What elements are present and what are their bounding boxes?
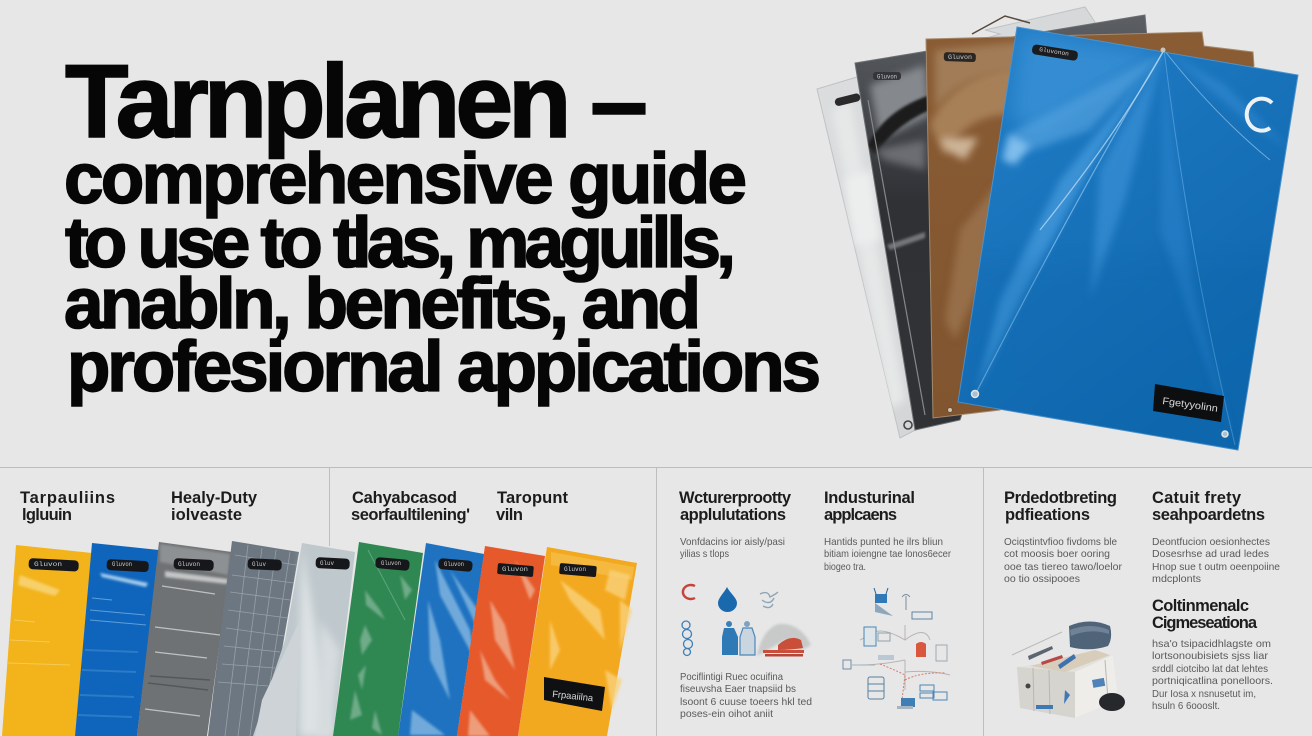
- icon: swirl: [760, 592, 778, 608]
- tarp: blue front: [958, 27, 1300, 470]
- heading: Coltinmenalc: Coltinmenalc: [1152, 597, 1249, 615]
- heading: Catuit frety: Catuit frety: [1152, 489, 1242, 507]
- heading: Healy-Duty: Healy-Duty: [171, 489, 258, 507]
- text block: ooe tas tiereo tawo/loelor: [1004, 561, 1122, 573]
- heading: Prdedotbreting: [1004, 489, 1117, 524]
- swatch: orange: Gluvon: [502, 566, 528, 573]
- heading: Wcturerprootty: Wcturerprootty: [679, 489, 792, 507]
- text block: lsoont 6 cuuse toeers hkl ted: [680, 696, 812, 708]
- heading: Cahyabcasod: Cahyabcasod: [352, 489, 457, 507]
- product label: [1153, 384, 1224, 422]
- grommets: [972, 390, 1228, 437]
- swatch: yellow: [2, 545, 92, 736]
- text block: [1152, 536, 1280, 585]
- tarp: brown: Gluvon: [948, 54, 972, 61]
- swatch: blue glossy: [398, 543, 484, 736]
- heading: Wcturerprootty: [679, 489, 792, 524]
- heading: Catuit frety: [1152, 489, 1265, 524]
- text block: hsuln 6 6oooslt.: [1152, 700, 1220, 712]
- panel: material swatches: [2, 489, 637, 736]
- small label: [1031, 44, 1078, 61]
- title: [64, 44, 821, 407]
- text block: Dosesrhse ad urad ledes: [1152, 548, 1269, 560]
- swatch: blue: [75, 543, 159, 736]
- text block: portniqicatlina ponelloors.: [1152, 675, 1273, 687]
- swatch: green: [333, 542, 423, 736]
- swatch: blue: Gluvon: [112, 561, 132, 568]
- panel: applications: [679, 489, 951, 720]
- heading: Wcturerprootty: applulutations: [680, 506, 786, 524]
- text block: [680, 536, 785, 560]
- text block: bitiam ioiengne tae lonos6ecer: [824, 548, 951, 560]
- swatch: grey: [137, 542, 232, 736]
- logo mark: [1247, 99, 1272, 131]
- swatch: translucent: Gluv: [320, 560, 334, 567]
- hero image: fanned tarpaulin sheets: [817, 7, 1300, 470]
- swatch: orange: [457, 546, 545, 736]
- heading: Taropunt: [496, 489, 568, 524]
- heading: Cahyabcasod: [351, 489, 470, 524]
- text block: oo tio ossipooes: [1004, 573, 1080, 585]
- icon: bottles: [722, 621, 755, 655]
- tarp: black: Gluvon: [877, 74, 897, 80]
- heading: Coltinmenalc: Cigmeseationa: [1152, 614, 1258, 632]
- small label: Gluvonon: [1039, 46, 1070, 58]
- heading: Industurinal: Industurinal: [824, 489, 915, 507]
- heading: Healy-Duty: iolveaste: [171, 506, 242, 524]
- dividers: [0, 468, 1312, 736]
- title: profesiornal appications: [67, 328, 821, 407]
- text block: cot moosis boer ooring: [1004, 548, 1110, 560]
- text block: yilias s tlops: [680, 548, 729, 560]
- hanging cord: [972, 16, 1030, 34]
- title: comprehensive guide: [64, 140, 747, 219]
- title: anabln, benefits, and: [64, 265, 701, 344]
- swatch: blue glossy: Gluvon: [444, 561, 464, 568]
- heading: Industurinal: [824, 489, 915, 524]
- tarp: black: [855, 15, 1147, 430]
- swatch: translucent: [253, 543, 355, 736]
- heading: Tarpauliins: Tarpauliins: [20, 489, 115, 507]
- title: to use to tlas, maguills,: [65, 204, 736, 283]
- swatch: amber with label: Gluvon: [564, 566, 586, 573]
- text block: lortsonoubisiets sjss liar: [1152, 650, 1269, 662]
- swatch: yellow: Gluvon: [34, 561, 63, 568]
- product label: Frpaaiilna: [552, 689, 594, 704]
- text block: [680, 671, 812, 720]
- icon: chain: [682, 621, 692, 656]
- product label: Fgetyyolinn: [1162, 396, 1219, 415]
- text block: fiseuvsha Eaer tnapsiid bs: [680, 683, 796, 695]
- swatch: slate grid: [208, 541, 299, 736]
- icon group: waterproofing: [682, 585, 811, 656]
- tarp: translucent white: [817, 7, 1095, 438]
- illustration: packaged tarp on box: [1012, 622, 1125, 718]
- text block: [1004, 536, 1122, 585]
- text block: Dur Iosa x nsnusetut im,: [1152, 688, 1256, 700]
- tarp: brown: [926, 32, 1254, 418]
- swatch: grey: Gluvon: [178, 561, 200, 568]
- text block: poses-ein oihot aniit: [680, 708, 773, 720]
- heading: Coltinmenalc: [1152, 597, 1258, 632]
- text block: [824, 536, 951, 573]
- text block: Ociqstintvfioo fivdoms ble: [1004, 536, 1117, 548]
- heading: Tarpauliins: lgluuin: [22, 506, 72, 524]
- icon: red ring: [683, 585, 695, 599]
- text block: Hnop sue t outm oeenpoiine: [1152, 561, 1280, 573]
- icon: water drop: [718, 587, 737, 612]
- heading: Tarpauliins: [20, 489, 115, 524]
- diagram: industrial network: [843, 588, 950, 709]
- swatch: amber with label: [518, 547, 637, 736]
- text block: Hantids punted he ilrs bliun: [824, 536, 943, 548]
- icon: tarp over goods: [757, 624, 811, 656]
- heading: Prdedotbreting: Prdedotbreting: [1004, 489, 1117, 507]
- heading: Taropunt: Taropunt: [497, 489, 568, 507]
- text block: [1152, 638, 1273, 712]
- text block: srddl ciotcibo lat dat lehtes: [1152, 663, 1268, 675]
- text block: hsa'o tsipacidhlagste om: [1152, 638, 1271, 650]
- title: Tarnplanen –: [65, 44, 648, 160]
- swatch: slate grid: Gluv: [252, 561, 266, 568]
- heading: Cahyabcasod: seorfaultilening': [351, 506, 470, 524]
- heading: Healy-Duty: [171, 489, 258, 524]
- text block: mdcplonts: [1152, 573, 1201, 585]
- heading: Taropunt: viln: [496, 506, 523, 524]
- text block: Deontfucion oesionhectes: [1152, 536, 1270, 548]
- swatch: green: Gluvon: [381, 560, 401, 567]
- text block: biogeo tra.: [824, 561, 866, 573]
- heading: Industurinal: applcaens: [824, 506, 897, 524]
- heading: Catuit frety: seahpoardetns: [1152, 506, 1265, 524]
- text block: Vonfdacins ior aisly/pasi: [680, 536, 785, 548]
- heading: Prdedotbreting: pdfieations: [1005, 506, 1090, 524]
- panel: professional uses: [1004, 489, 1280, 718]
- text block: Pociflintigi Ruec ocuifina: [680, 671, 783, 683]
- product label: [544, 677, 605, 711]
